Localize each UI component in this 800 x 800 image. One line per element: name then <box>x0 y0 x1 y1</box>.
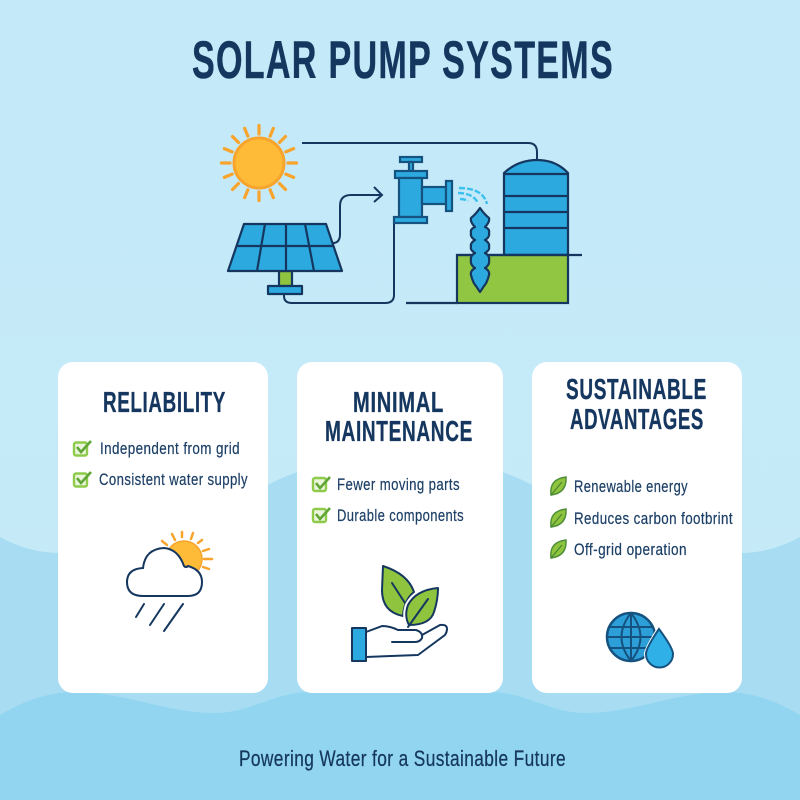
heading: minimal maintenance: MINIMAL <box>353 387 444 419</box>
list item: reduces carbon footbrint: Reduces carbon footbrint <box>574 510 733 528</box>
water tank <box>504 160 568 255</box>
list item: consistent water supply: Consistent water supply <box>99 471 248 489</box>
list item: reduces carbon footbrint <box>551 509 733 528</box>
water column <box>471 208 489 292</box>
diagram: solar pump system <box>222 126 582 303</box>
list item: renewable energy: Renewable energy <box>574 478 688 496</box>
panel: minimal maintenance <box>297 362 503 693</box>
list item: fewer moving parts <box>313 476 460 494</box>
wire: panel base to pump <box>284 222 394 303</box>
heading: sustainable advantages: ADVANTAGES <box>570 404 704 436</box>
wire: sun to tank <box>302 143 537 161</box>
ground block <box>406 255 582 303</box>
heading: reliability: RELIABILITY <box>103 387 226 419</box>
list item: fewer moving parts: Fewer moving parts <box>337 476 460 494</box>
wire: panel to pump arrow <box>333 187 382 243</box>
icon: sun <box>222 126 296 200</box>
background wave: middle <box>0 458 800 800</box>
list item: durable components <box>313 507 464 525</box>
heading: minimal maintenance <box>325 387 473 448</box>
list item: independent from grid: Independent from grid <box>100 440 240 458</box>
heading: minimal maintenance: MAINTENANCE <box>325 416 473 448</box>
icon: sun behind rain cloud <box>127 532 212 631</box>
footer tagline: Powering Water for a Sustainable Future <box>239 746 566 771</box>
list item: renewable energy <box>551 477 688 496</box>
heading: sustainable advantages <box>566 374 707 436</box>
water spray <box>458 188 487 204</box>
icon: globe and water drop <box>607 613 675 669</box>
panel: sustainable advantages <box>532 362 742 693</box>
solar panel <box>228 224 342 294</box>
background wave: bottom <box>0 692 800 800</box>
list item: off-grid operation: Off-grid operation <box>574 541 687 559</box>
list item: durable components: Durable components <box>337 507 464 525</box>
pump <box>394 157 452 223</box>
icon: hand holding leaves <box>352 566 447 661</box>
list item: off-grid operation <box>551 540 687 559</box>
heading: sustainable advantages: SUSTAINABLE <box>566 374 707 406</box>
panel: reliability <box>58 362 268 693</box>
